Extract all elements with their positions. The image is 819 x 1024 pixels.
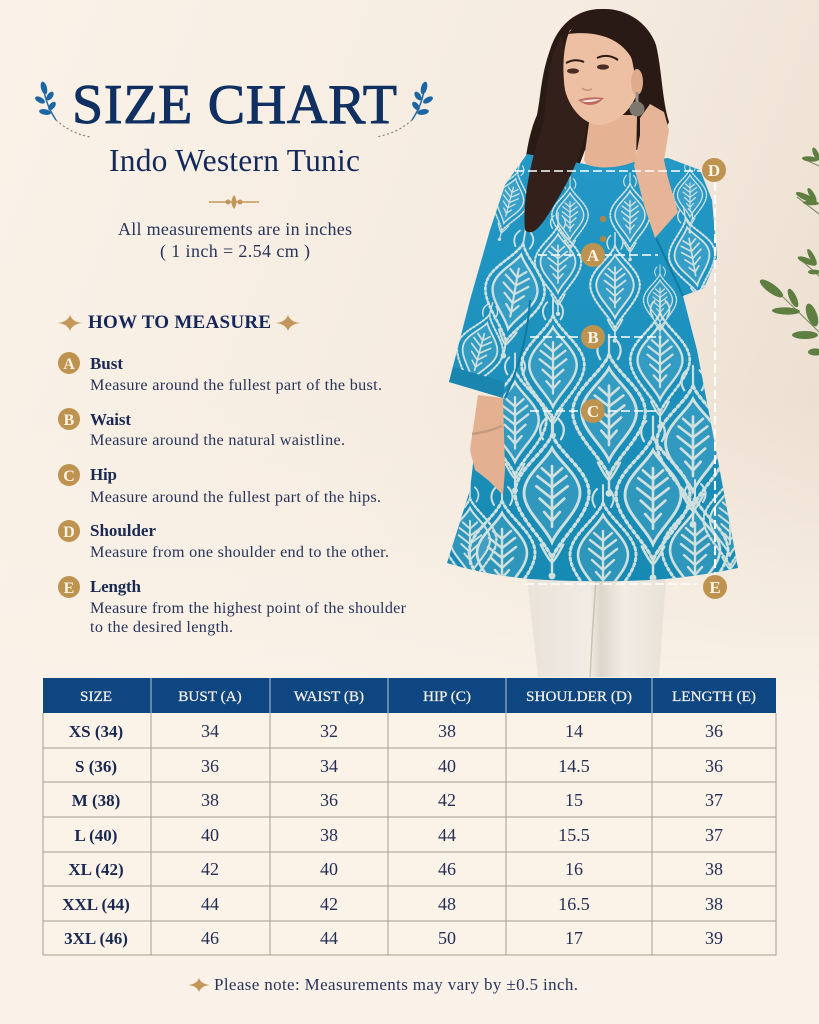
item: hip bbox=[58, 464, 381, 506]
row: XS: 38 bbox=[438, 721, 456, 741]
marker C bbox=[581, 399, 605, 423]
row: M: 38 bbox=[201, 790, 219, 810]
icon: gold divider bbox=[209, 195, 259, 209]
hair front strand bbox=[524, 35, 587, 232]
tunic placket buttons bbox=[600, 216, 606, 242]
marker A: A bbox=[587, 246, 600, 265]
row: S: S (36) bbox=[75, 757, 117, 776]
row: XL bbox=[68, 859, 723, 879]
marker B: B bbox=[587, 328, 599, 347]
footnote text: Please note: Measurements may vary by ±0.5 inch. bbox=[214, 975, 578, 994]
trousers bbox=[527, 578, 666, 677]
item: shoulder: Shoulder bbox=[90, 521, 156, 540]
row: 3XL: 3XL (46) bbox=[64, 929, 128, 948]
row: L: L (40) bbox=[75, 826, 117, 845]
row: L: 37 bbox=[705, 825, 723, 845]
row: L: 40 bbox=[201, 825, 219, 845]
table header: WAIST (B) bbox=[294, 688, 364, 705]
row: XS: 34 bbox=[201, 721, 219, 741]
row: 3XL: 46 bbox=[201, 928, 219, 948]
icon: left star bbox=[57, 315, 83, 331]
table header bbox=[43, 678, 776, 713]
units note: ( 1 inch = 2.54 cm ) bbox=[160, 241, 310, 262]
row: 3XL: 50 bbox=[438, 928, 456, 948]
row: S: 36 bbox=[705, 756, 723, 776]
row: XS: 32 bbox=[320, 721, 338, 741]
item: length: Length bbox=[90, 577, 142, 596]
row: S bbox=[75, 756, 723, 776]
measurement guides bbox=[515, 171, 715, 584]
row: XXL: 44 bbox=[201, 894, 219, 914]
item: bust bbox=[58, 352, 382, 394]
row: 3XL: 44 bbox=[320, 928, 338, 948]
item: shoulder: D bbox=[63, 524, 75, 541]
background fade bbox=[0, 400, 819, 1024]
table header: BUST (A) bbox=[178, 688, 242, 705]
row: S: 40 bbox=[438, 756, 456, 776]
table body background bbox=[43, 713, 776, 955]
item: length: E bbox=[64, 580, 74, 597]
tunic bbox=[447, 154, 738, 582]
row: L: 44 bbox=[438, 825, 456, 845]
ear and earring bbox=[630, 69, 644, 116]
item: bust: Measure around the fullest part of the bust. bbox=[90, 376, 382, 394]
row: XL: 38 bbox=[705, 859, 723, 879]
row: XS: 36 bbox=[705, 721, 723, 741]
row: 3XL: 17 bbox=[565, 928, 583, 948]
raised forearm and hand bbox=[634, 104, 678, 238]
row: XS bbox=[69, 721, 723, 741]
row: L: 15.5 bbox=[558, 825, 590, 845]
row: XXL bbox=[62, 894, 723, 914]
row: XL: 42 bbox=[201, 859, 219, 879]
row: XL: 40 bbox=[320, 859, 338, 879]
row: M: 42 bbox=[438, 790, 456, 810]
footnote bbox=[188, 975, 578, 994]
face bbox=[563, 28, 638, 125]
row: M: M (38) bbox=[72, 791, 120, 810]
row: XL: XL (42) bbox=[68, 860, 124, 879]
row: XXL: XXL (44) bbox=[62, 895, 130, 914]
heading: how to measure: HOW TO MEASURE bbox=[88, 312, 271, 333]
row: XL: 46 bbox=[438, 859, 456, 879]
item: hip: Hip bbox=[90, 465, 117, 484]
marker D bbox=[702, 158, 726, 182]
icon: footnote star bbox=[188, 978, 210, 992]
item: waist: B bbox=[64, 412, 75, 429]
row: L: 38 bbox=[320, 825, 338, 845]
marker B bbox=[581, 325, 605, 349]
row: XXL: 16.5 bbox=[558, 894, 590, 914]
row: S: 34 bbox=[320, 756, 338, 776]
item: length: to the desired length. bbox=[90, 618, 233, 636]
table header: LENGTH (E) bbox=[672, 688, 756, 705]
row: L bbox=[75, 825, 723, 845]
marker E bbox=[703, 575, 727, 599]
lowered hand and bracelet bbox=[470, 395, 505, 495]
plant at right edge bbox=[758, 147, 819, 356]
row: XS: XS (34) bbox=[69, 722, 123, 741]
item: length bbox=[58, 576, 407, 636]
marker D: D bbox=[708, 161, 720, 180]
eyes brows lips bbox=[566, 56, 618, 105]
row: M: 37 bbox=[705, 790, 723, 810]
row: XL: 16 bbox=[565, 859, 583, 879]
icon: right star bbox=[275, 315, 301, 331]
table header: SHOULDER (D) bbox=[526, 688, 632, 705]
item: bust: Bust bbox=[90, 354, 123, 373]
item: hip: C bbox=[63, 468, 75, 485]
row: 3XL: 39 bbox=[705, 928, 723, 948]
item: shoulder bbox=[58, 520, 389, 561]
row: XS: 14 bbox=[565, 721, 583, 741]
hair back bbox=[520, 9, 669, 238]
item: waist: Waist bbox=[90, 410, 131, 429]
row: XXL: 42 bbox=[320, 894, 338, 914]
row: XXL: 38 bbox=[705, 894, 723, 914]
title: SIZE CHART bbox=[72, 74, 397, 136]
marker C: C bbox=[587, 402, 599, 421]
row: S: 14.5 bbox=[558, 756, 590, 776]
units note bbox=[118, 219, 352, 262]
item: hip: Measure around the fullest part of the hips. bbox=[90, 488, 381, 506]
table header: HIP (C) bbox=[423, 688, 471, 705]
size table bbox=[43, 678, 776, 955]
item: length: Measure from the highest point of the shoulder bbox=[90, 599, 407, 617]
panel: how to measure bbox=[57, 312, 407, 636]
table header: SIZE bbox=[80, 688, 112, 705]
item: waist bbox=[58, 408, 345, 449]
marker A bbox=[581, 243, 605, 267]
units note: All measurements are in inches bbox=[118, 219, 352, 239]
icon: right laurel sprig bbox=[376, 81, 434, 137]
row: 3XL bbox=[64, 928, 723, 948]
subtitle: Indo Western Tunic bbox=[109, 143, 360, 178]
marker E: E bbox=[709, 578, 721, 597]
model figure bbox=[440, 9, 756, 677]
item: bust: A bbox=[63, 356, 75, 373]
neck and chest bbox=[584, 115, 637, 205]
item: shoulder: Measure from one shoulder end to the other. bbox=[90, 543, 389, 561]
row: M: 15 bbox=[565, 790, 583, 810]
hair top bbox=[568, 14, 655, 78]
row: S: 36 bbox=[201, 756, 219, 776]
row: M bbox=[72, 790, 723, 810]
item: waist: Measure around the natural waistline. bbox=[90, 431, 345, 449]
row: M: 36 bbox=[320, 790, 338, 810]
row: XXL: 48 bbox=[438, 894, 456, 914]
icon: left laurel sprig bbox=[34, 81, 90, 137]
